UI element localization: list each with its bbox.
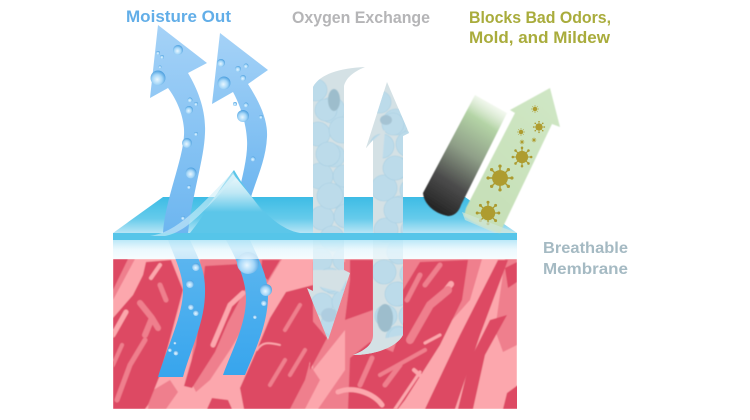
label: Blocks Bad Odors: Blocks Bad Odors,	[469, 9, 611, 27]
tissue red areas	[113, 259, 518, 409]
oxygen left strip	[307, 67, 364, 340]
arrow 2 lower reflection	[223, 240, 268, 375]
green fade on membrane	[462, 212, 517, 233]
arrow 1 upper	[150, 25, 207, 233]
label: Blocks Bad Odors	[469, 9, 611, 47]
carbon band	[423, 95, 507, 216]
label: Breathable Membrane	[543, 240, 628, 278]
viruses	[476, 201, 500, 225]
tissue mid-pink details	[113, 265, 448, 400]
bump left highlight	[150, 172, 236, 236]
label: Oxygen Exchange: Oxygen Exchange	[292, 9, 430, 27]
tissue mid-pink areas	[113, 259, 517, 409]
tissue light streak details	[113, 265, 451, 409]
bump peak	[203, 174, 263, 212]
membrane bump	[190, 170, 300, 233]
green arrow	[464, 88, 560, 233]
upper bubbles	[150, 45, 263, 220]
label: Moisture Out: Moisture Out	[126, 8, 232, 26]
membrane band	[113, 233, 517, 240]
label: Blocks Bad Odors: Mold, and Mildew	[469, 29, 610, 47]
tissue panel	[113, 259, 518, 409]
arrow 2 upper	[212, 33, 268, 200]
label: Breathable Membrane: Breathable	[543, 240, 628, 257]
label: Breathable Membrane: Membrane	[543, 261, 628, 278]
oxygen right strip	[353, 82, 409, 355]
arrow 1 lower reflection	[158, 240, 205, 377]
membrane pale lower layer	[113, 240, 517, 259]
membrane top surface	[113, 197, 517, 233]
lower bubbles	[168, 252, 272, 356]
